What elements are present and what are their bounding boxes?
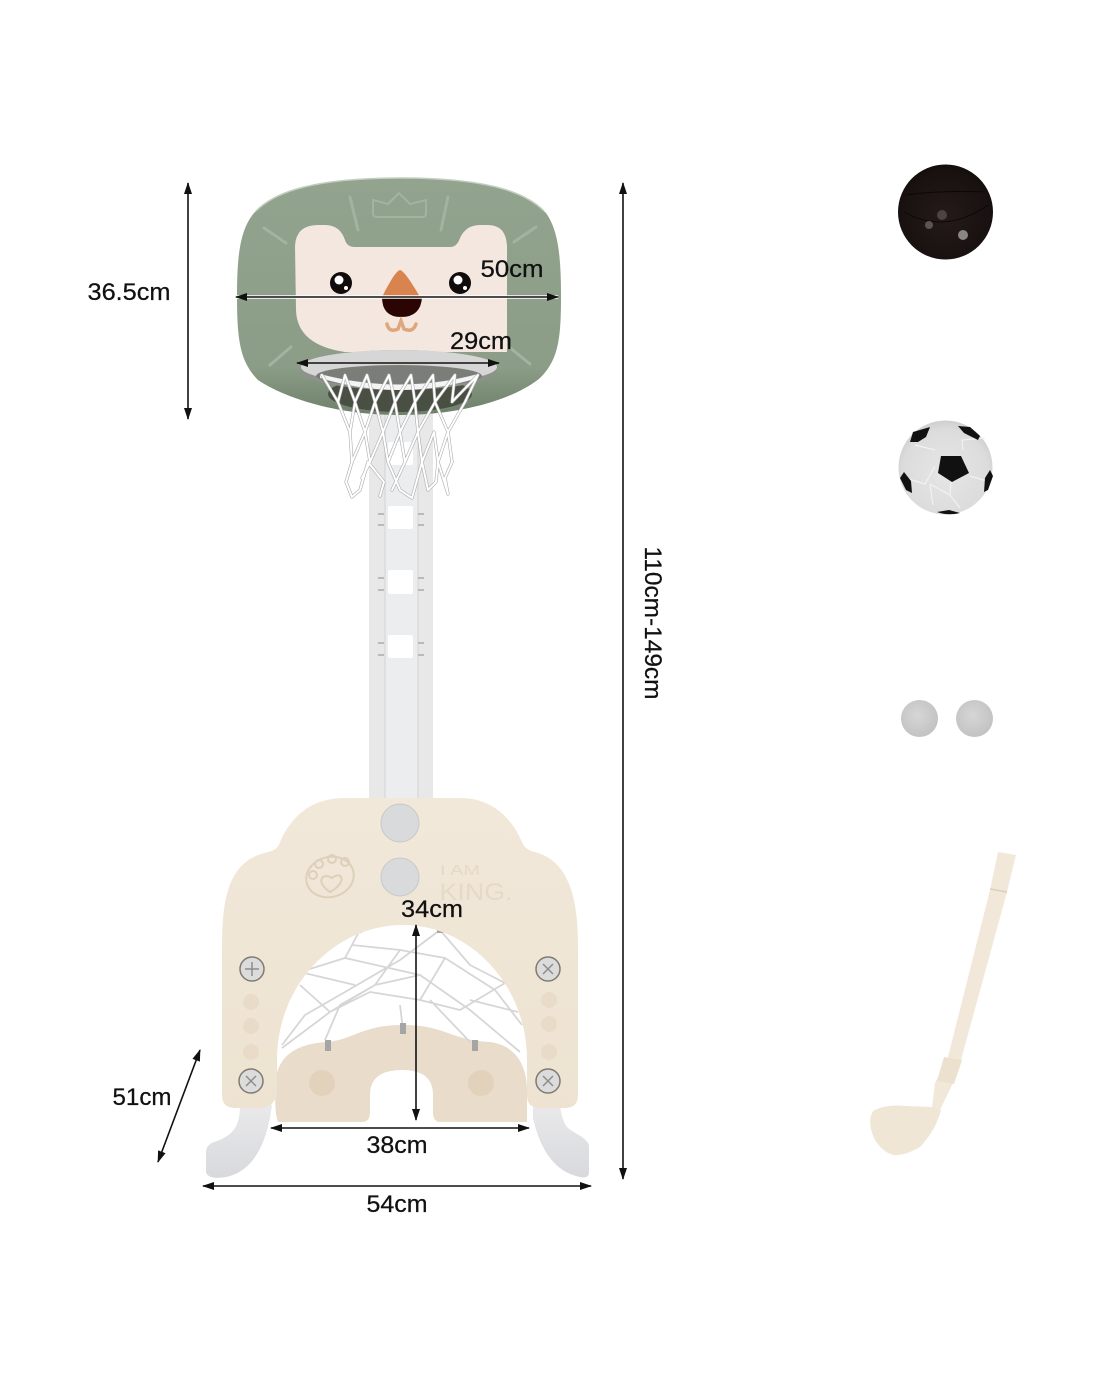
embossed brand text: I AM: [440, 862, 480, 879]
club sleeve: [937, 1057, 962, 1084]
right patch: [984, 470, 993, 492]
goal net: [282, 930, 522, 1052]
dimension: base depth: [112, 1050, 200, 1162]
left patch: [900, 472, 912, 493]
dimension: base depth: 51cm: [112, 1084, 172, 1111]
backboard body: [237, 178, 561, 415]
dimension: base width: 54cm: [366, 1191, 428, 1218]
backboard: [237, 178, 561, 415]
dimension: hoop diameter: 29cm: [450, 328, 512, 355]
bear mouth: [382, 297, 422, 317]
left eye: [330, 272, 352, 294]
club head: [870, 1106, 941, 1155]
hoop net: [322, 375, 478, 498]
embossed brand text: [440, 862, 512, 906]
right eye: [449, 272, 471, 294]
top button: [381, 804, 419, 842]
goal rear base: [275, 1025, 527, 1122]
middle button: [381, 858, 419, 896]
hoop rim: [301, 350, 497, 390]
panel seams: [905, 438, 990, 508]
dimension: goal height: 34cm: [401, 896, 463, 923]
goal feet: [206, 1105, 589, 1178]
side dimples: [243, 992, 557, 1060]
soccer ball: [898, 420, 993, 514]
top left patch: [910, 427, 930, 442]
dimension: backboard width: 50cm: [480, 256, 544, 283]
right foot: [533, 1105, 589, 1177]
golf club: [870, 852, 1016, 1155]
goal net clips: [289, 923, 514, 1051]
club shaft: [932, 852, 1016, 1110]
bear smile: [387, 321, 416, 330]
dimension: total height: 110cm-149cm: [639, 546, 666, 700]
top right patch: [958, 426, 980, 440]
left foot: [206, 1105, 272, 1178]
pair of small balls: [901, 700, 993, 737]
embossed brand text: KING.: [440, 879, 512, 906]
black basketball: [898, 164, 993, 260]
bear face panel: [295, 225, 507, 352]
dimension: goal width: 38cm: [366, 1132, 428, 1159]
centre pentagon: [938, 456, 969, 482]
screw slots: [245, 962, 553, 1086]
base dimples: [309, 1070, 494, 1096]
screws: [239, 957, 560, 1093]
paw emblem: [302, 851, 358, 903]
hoop stand pole: [369, 410, 433, 802]
bottom patch: [937, 510, 960, 514]
bear nose: [382, 270, 420, 297]
goal front frame: [222, 798, 578, 1108]
backboard embossed marks: [264, 193, 536, 365]
shadow under the rim: [328, 376, 472, 412]
dimension: backboard height: 36.5cm: [88, 279, 170, 306]
